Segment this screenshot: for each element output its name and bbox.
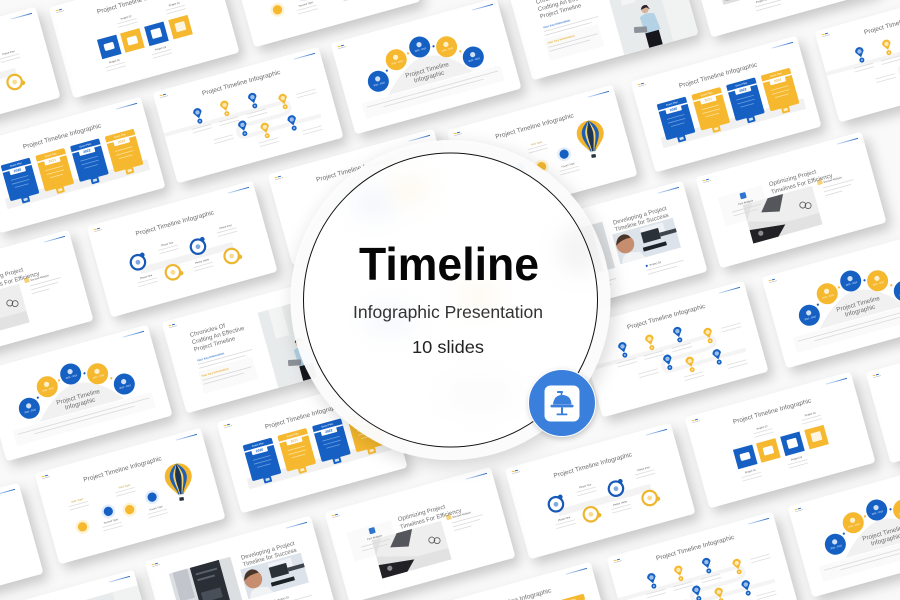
slide: bars left <box>0 97 165 233</box>
slide: developing right <box>517 181 707 317</box>
subtitle: Infographic Presentation <box>353 302 543 322</box>
slide: optimizing bottom <box>325 467 515 600</box>
slide: developing bottom: Timeline for Success <box>242 548 297 568</box>
slide: arcs top: Infographic <box>413 70 445 85</box>
slide: arcs left <box>0 325 172 461</box>
slide: arcs left: Infographic <box>64 397 96 412</box>
slide: rings top left <box>0 7 60 143</box>
slide: chronicles top <box>508 0 699 83</box>
slide: behind disc: Project Timeline Infographic <box>315 155 395 184</box>
slide: arcs right: Infographic <box>844 304 876 319</box>
slide: balloon lower left <box>35 428 225 564</box>
slide: arcs left: Project Timeline <box>56 388 101 407</box>
slide: arcs right <box>762 232 900 368</box>
slide: chronicles bottom left <box>0 570 159 600</box>
slide: rings left: Project Timeline Infographic <box>135 209 215 238</box>
slide: squares right: Project Timeline Infographic <box>732 397 812 426</box>
slide: chronicles centre: Crafting An Effective <box>191 326 246 346</box>
slide: optimizing bottom: Optimizing Project <box>397 504 446 523</box>
slide: balloon centre: Project Timeline Infographic <box>495 112 575 141</box>
slide: developing right: Developing a Project <box>612 206 668 227</box>
slide: bars centre <box>217 377 407 513</box>
slide: pin timeline lower: Project Timeline Infographic <box>626 303 706 331</box>
slide: rings lower: Project Timeline Infographic <box>553 451 633 480</box>
slide: pin timeline: Project Timeline Infographic <box>201 69 281 97</box>
icon: keynote badge <box>528 370 596 436</box>
slide: pin timeline <box>153 47 343 183</box>
slide: bars centre: Project Timeline Infographic <box>264 402 344 431</box>
slide: pin timeline bottom <box>607 512 797 600</box>
slide: squares top left <box>49 0 239 98</box>
slide: bars right <box>631 36 821 172</box>
slide: rings left <box>87 181 277 317</box>
slide: bars left: Project Timeline Infographic <box>22 122 102 151</box>
slide: developing bottom <box>145 516 335 600</box>
slide: far right blank <box>866 327 900 463</box>
title: Timeline <box>359 238 539 290</box>
slide: developing right: Timeline for Success <box>614 213 669 233</box>
slide: bars right: Project Timeline Infographic <box>678 61 758 90</box>
slide: optimizing right <box>696 132 886 268</box>
slide: optimizing left <box>0 230 93 366</box>
slide: arcs top: Project Timeline <box>405 61 450 80</box>
slide: chronicles centre: Project Timeline <box>193 336 237 353</box>
slide: chronicles centre <box>162 277 353 416</box>
slide: chronicles centre: Chronicles Of <box>189 323 226 339</box>
slide: optimizing right: Optimizing Project <box>768 169 817 188</box>
slide: rings lower <box>505 423 695 559</box>
slide count: 10 slides <box>412 337 484 357</box>
slide: pin timeline right <box>815 0 900 122</box>
slide: squares right <box>685 372 875 508</box>
slide: chronicles top: Project Timeline <box>539 3 583 20</box>
slide: balloon top <box>230 0 420 47</box>
slide: balloon lower left: Project Timeline Infographic <box>83 455 163 484</box>
slide: arcs right: Project Timeline <box>836 295 881 314</box>
slide: pin timeline lower <box>578 281 768 417</box>
slide: optimizing bottom: Timelines For Efficiency <box>400 508 462 531</box>
slide: bars bottom <box>425 562 615 600</box>
slide: arcs top <box>331 0 521 134</box>
slide: far left blank <box>0 483 43 600</box>
slide: developing top right <box>687 0 877 37</box>
slide: arcs lower right <box>788 461 900 597</box>
slide: pin timeline bottom: Project Timeline Infographic <box>655 534 735 562</box>
slide: optimizing right: Timelines For Efficiency <box>771 173 833 196</box>
slide: balloon centre <box>447 85 637 221</box>
slide: behind disc <box>268 129 458 265</box>
slide: developing bottom: Developing a Project <box>240 541 296 562</box>
frosted glass disc <box>290 140 610 460</box>
